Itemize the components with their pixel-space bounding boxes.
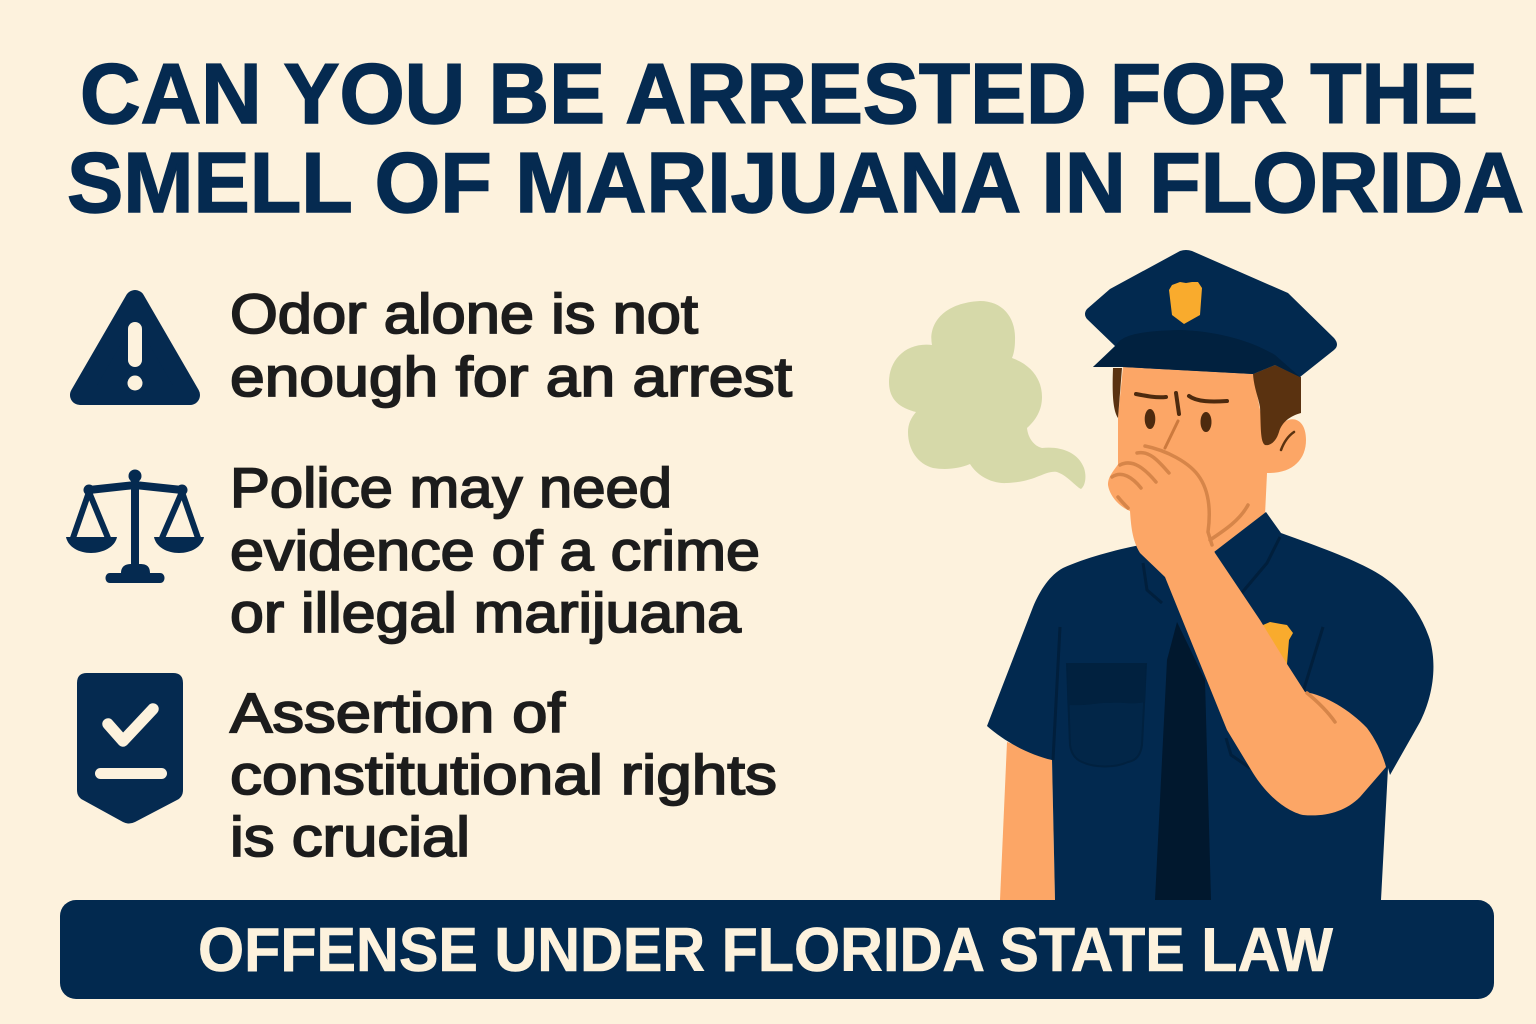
text: odor alone: Odor alone is not	[230, 282, 698, 345]
cap brim	[1093, 330, 1300, 377]
text: odor alone	[230, 282, 792, 408]
banner: OFFENSE UNDER FLORIDA STATE LAW	[198, 916, 1333, 985]
face details	[1136, 394, 1227, 401]
text: police evidence: or illegal marijuana	[230, 581, 742, 644]
ear	[1266, 419, 1306, 473]
uniform shirt	[987, 512, 1433, 900]
police cap	[1085, 250, 1337, 377]
neck and head	[1118, 367, 1267, 552]
chest badge	[1263, 622, 1293, 664]
icon: scales of justice	[66, 470, 204, 583]
shirt pocket	[1067, 664, 1146, 766]
left arm	[1000, 742, 1055, 900]
icon: shield with check	[77, 673, 183, 824]
ear line	[1281, 432, 1294, 450]
hair	[1113, 365, 1301, 445]
shirt seams	[1053, 537, 1323, 768]
title	[67, 47, 1524, 231]
forearm and hand	[1108, 445, 1386, 815]
icon: odor cloud	[889, 301, 1085, 489]
illustration: police officer	[987, 250, 1433, 900]
hand and neck lines	[1112, 446, 1335, 722]
text: police evidence: evidence of a crime	[230, 519, 760, 582]
banner	[60, 900, 1494, 999]
text: constitutional rights	[230, 681, 777, 868]
title: SMELL OF MARIJUANA IN FLORIDA	[67, 136, 1524, 231]
text: constitutional rights: Assertion of	[230, 681, 565, 744]
tie	[1155, 622, 1211, 900]
text: constitutional rights: constitutional rights	[230, 743, 777, 806]
icon: warning triangle	[80, 300, 190, 395]
text: police evidence: Police may need	[230, 456, 672, 519]
text: odor alone: enough for an arrest	[230, 345, 792, 408]
text: constitutional rights: is crucial	[230, 805, 470, 868]
title: CAN YOU BE ARRESTED FOR THE	[80, 47, 1478, 142]
cap badge	[1169, 282, 1202, 324]
text: police evidence	[230, 456, 760, 644]
